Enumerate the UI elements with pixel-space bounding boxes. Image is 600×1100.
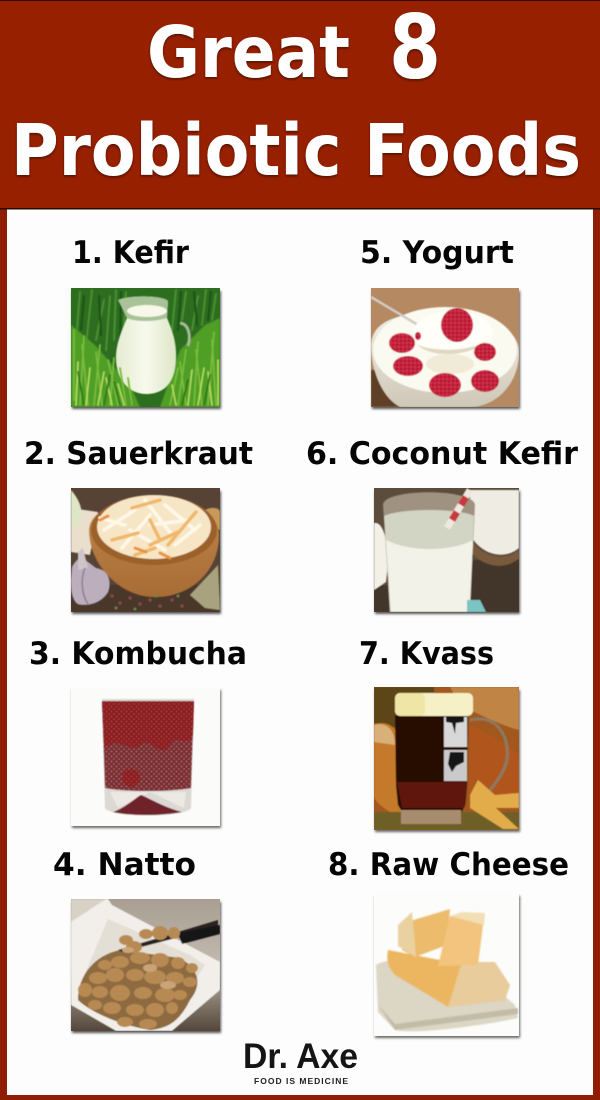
- label: 2. Sauerkraut: 2. Sauerkraut: [24, 436, 253, 472]
- photo: kombucha glass: [71, 687, 221, 828]
- title: [11, 0, 581, 192]
- header banner: [0, 0, 600, 210]
- label: 4. Natto: 4. Natto: [53, 847, 196, 883]
- photo: coconut kefir glass: [374, 488, 520, 614]
- logo: Dr. Axe: Dr. Axe: [243, 1037, 358, 1076]
- photo: kvass mug: [374, 687, 520, 832]
- photo: natto in tray: [71, 899, 221, 1033]
- label: 8. Raw Cheese: 8. Raw Cheese: [328, 847, 569, 883]
- label: 5. Yogurt: 5. Yogurt: [360, 235, 514, 271]
- photo: sauerkraut in wooden bowl: [71, 488, 221, 614]
- photo: kefir jug in wheatgrass: [71, 288, 221, 409]
- label: 1. Kefir: 1. Kefir: [72, 235, 190, 271]
- label: 3. Kombucha: 3. Kombucha: [29, 636, 247, 672]
- photo: yogurt with raspberries: [371, 288, 520, 409]
- title: Great: [147, 11, 350, 94]
- tagline: FOOD IS MEDICINE: [254, 1076, 348, 1086]
- label: 6. Coconut Kefir: 6. Coconut Kefir: [306, 436, 579, 472]
- label: 7. Kvass: 7. Kvass: [359, 636, 494, 672]
- photo: raw cheese: [374, 893, 520, 1038]
